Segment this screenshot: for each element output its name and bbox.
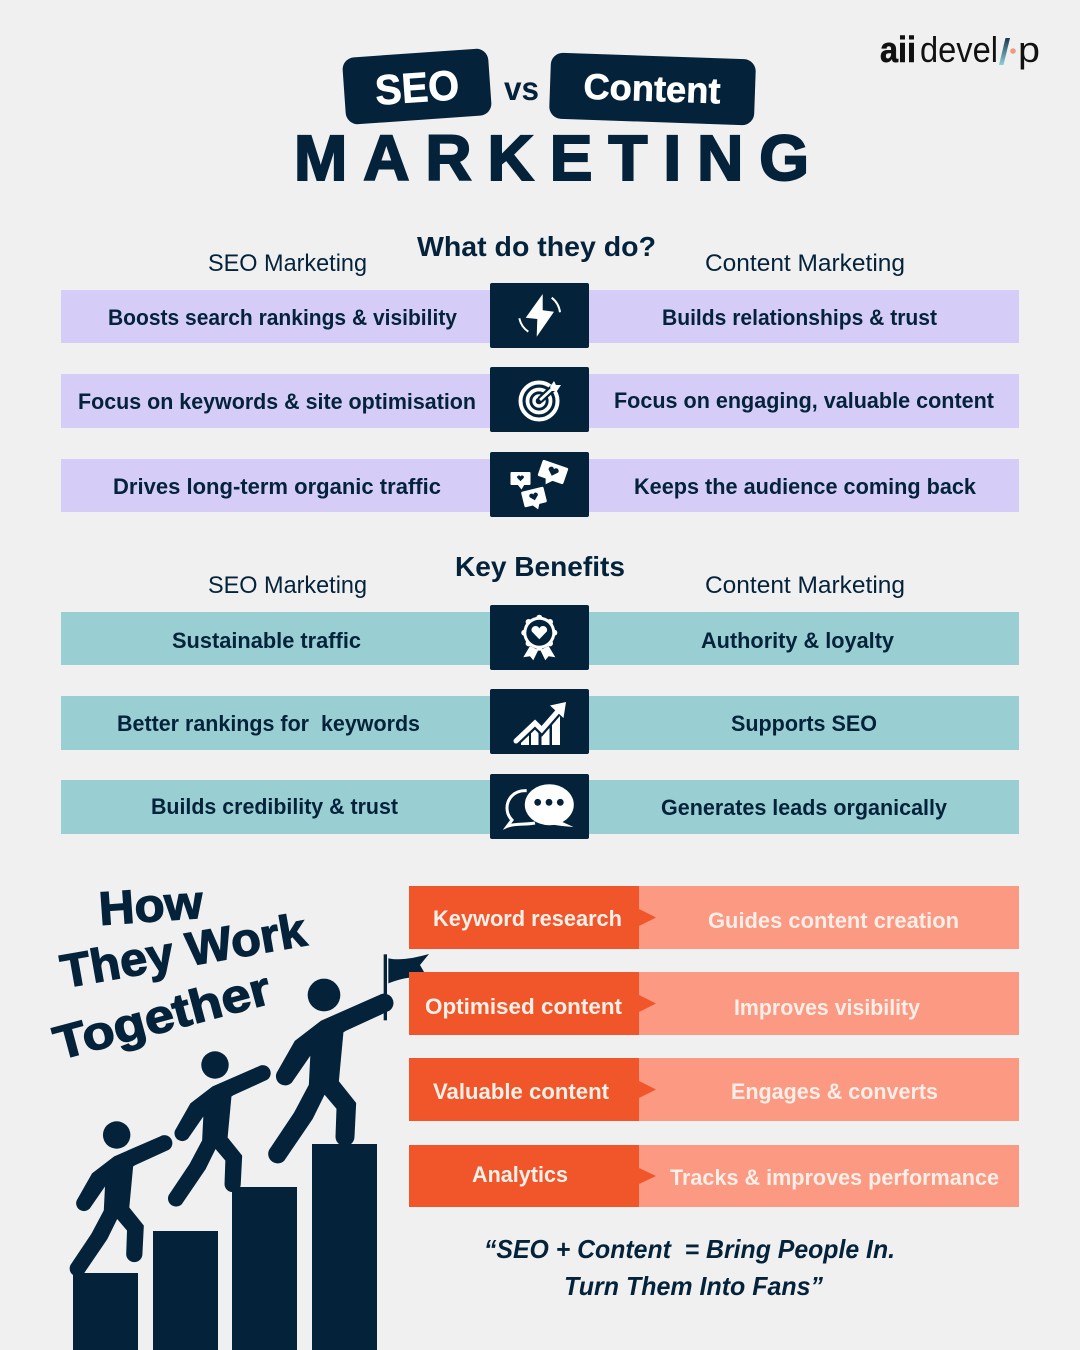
vs label: vs [504,70,539,107]
logo: aii develop: p [1018,29,1040,70]
column label: Content Marketing: Content Marketing [705,250,905,277]
heading: How They Work Together: How [97,875,205,935]
icon: target with arrow [520,381,561,420]
column label: SEO Marketing: SEO Marketing [208,572,367,599]
badge: Content: Content [583,66,721,111]
heading: How They Work Together: Together [48,961,276,1070]
row: sustainable traffic vs authority: Authority & loyalty [701,628,895,653]
quote: “SEO + Content = Bring People In. [484,1234,895,1264]
icon: growth chart [516,702,566,745]
title [294,48,809,194]
row: keywords vs engaging content: Focus on keywords & site optimisation [78,389,476,414]
row: rankings vs supports SEO [61,689,1019,754]
heading: MARKETING: MARKETING [294,122,809,194]
figure: leader with flag [269,954,429,1162]
section: Key Benefits [61,551,1019,839]
row: valuable content: Engages & converts [731,1079,938,1104]
quote [484,1234,895,1301]
badge: SEO [342,48,492,125]
row: keyword research [409,886,1019,949]
row: analytics: Tracks & improves performance [670,1165,999,1190]
illustration: figures climbing steps with flag [71,954,429,1350]
row: credibility vs leads [61,774,1019,839]
row: keywords vs engaging content: Focus on engaging, valuable content [614,388,995,413]
heading: Key Benefits: Key Benefits [455,551,625,582]
row: optimised content [409,972,1019,1035]
logo: aii develop: devel [920,29,998,70]
icon: lightning bolt [519,294,560,337]
row: valuable content: Valuable content [433,1079,610,1104]
row: organic traffic vs audience [61,452,1019,517]
row: organic traffic vs audience: Keeps the audience coming back [634,474,977,499]
heading: How They Work Together [48,875,311,1070]
stair bars [73,1144,377,1350]
heading: How They Work Together: They Work [57,902,311,998]
logo: aii develop [880,29,1040,70]
badge: Content [549,52,756,126]
row: optimised content: Improves visibility [734,995,921,1020]
row: rankings vs supports SEO: Better rankings for keywords [117,711,420,736]
row: rankings vs relationships: Builds relationships & trust [662,305,938,330]
row: analytics: Analytics [472,1162,568,1187]
column label: SEO Marketing: SEO Marketing [208,250,367,277]
icon: heart speech bubbles [510,460,569,512]
row: sustainable traffic vs authority [61,605,1019,670]
heading: What do they do?: What do they do? [417,231,656,262]
section: What do they do? [61,231,1019,517]
figure: lower climber [71,1121,171,1275]
panel: how they work together rows [409,886,1019,1207]
icon: chat bubbles [507,784,574,827]
column label: Content Marketing: Content Marketing [705,572,905,599]
row: valuable content [409,1058,1019,1121]
row: rankings vs relationships: Boosts search rankings & visibility [108,305,458,330]
row: credibility vs leads: Builds credibility & trust [151,794,399,819]
row: rankings vs relationships [61,283,1019,348]
quote: Turn Them Into Fans” [564,1271,823,1301]
row: sustainable traffic vs authority: Sustainable traffic [172,628,361,653]
badge: SEO: SEO [374,61,461,114]
row: rankings vs supports SEO: Supports SEO [731,711,877,736]
row: analytics [409,1145,1019,1207]
logo: aii develop: aii [880,29,916,70]
row: organic traffic vs audience: Drives long-term organic traffic [113,474,441,499]
icon: award ribbon with heart [521,615,557,660]
row: optimised content: Optimised content [425,994,623,1019]
figure: middle climber [169,1051,270,1205]
row: keyword research: Guides content creation [708,908,959,933]
row: keyword research: Keyword research [433,906,622,931]
row: keywords vs engaging content [61,367,1019,432]
row: credibility vs leads: Generates leads organically [661,795,948,820]
